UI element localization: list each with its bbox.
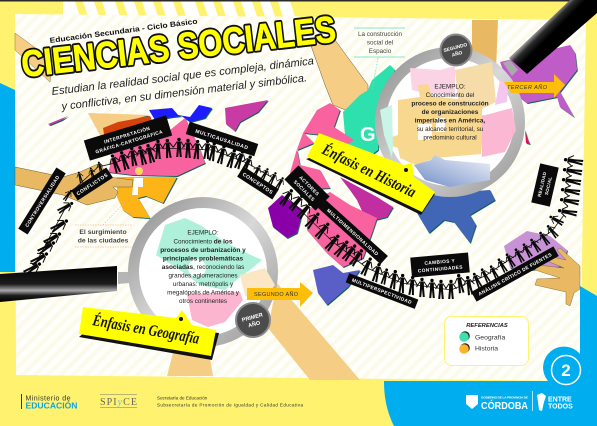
lens example text: urbanas: metrópolis y: [173, 281, 234, 288]
lens example text: de organizaciones: [422, 109, 479, 116]
continent: purple: [268, 195, 303, 238]
footer logo: ministerio de educación: Ministerio de: [26, 396, 71, 402]
footer logo: gobierno de córdoba: GOBIERNO DE LA PROVINCIA DE: [481, 396, 528, 400]
label: multicausalidad: MULTICAUSALIDAD: [194, 129, 249, 151]
lens example text: imperiales en América,: [415, 118, 485, 124]
lens example text: predominio cultural: [423, 134, 477, 142]
lens example text: procesos de urbanización y: [160, 247, 246, 254]
map beige: [240, 268, 275, 300]
label: interpretación gráfica-cartográfica: INTERPRETACIÓN: [103, 124, 151, 145]
map pink: [187, 292, 243, 327]
footer logo: spiyce: SPIyCE: [100, 397, 137, 408]
chain of people: [17, 138, 584, 299]
footer text: secretaría: [157, 396, 303, 408]
label: cambios y continuidades: CAMBIOS Y: [424, 258, 456, 267]
page number badge: [552, 356, 580, 384]
intro text: y conflictiva, en su dimensión material y simbólica.: [60, 72, 308, 113]
label: controversialidad: [18, 168, 66, 234]
puzzle pieces white and yellow: [132, 167, 143, 195]
banner: énfasis en geografía: Énfasis en Geografía: [91, 310, 201, 348]
continent: dark blue: [415, 190, 495, 243]
lens example text: asociadas, reconociendo las: [162, 264, 244, 271]
banner: énfasis en historia: Énfasis en Historia: [319, 139, 419, 201]
title: CIENCIAS SOCIALES: [19, 8, 338, 85]
label: realidad social: SOCIAL: [544, 176, 553, 196]
hand: left with chain: [15, 163, 133, 205]
caption: el surgimiento de las ciudades: El surgimiento: [79, 229, 127, 236]
continent: blue violet: [313, 265, 360, 305]
handle: [509, 0, 597, 74]
footer text: secretaría: Secretaría de Educación: [157, 396, 208, 400]
legend: referencias: Historia: [475, 346, 498, 352]
label: cambios y continuidades: [410, 253, 470, 277]
puzzle pieces: [410, 66, 455, 95]
label: cambios y continuidades: CONTINUIDADES: [418, 264, 464, 274]
intro text: Estudian la realidad social que es compleja, dinámica: [51, 55, 315, 98]
label: multiperspectividad: [346, 273, 418, 309]
footer logo: entre todos: [537, 393, 573, 411]
lens example text: megalópolis de América y: [167, 290, 240, 296]
label: conceptos: [237, 167, 279, 199]
title: CIENCIAS SOCIALES: [19, 8, 338, 85]
page number badge: 2: [561, 361, 571, 380]
lens example text: otros continentes: [179, 298, 227, 305]
banner: énfasis en geografía: [79, 307, 219, 360]
footer logo: ministerio de educación: EDUCACIÓN: [26, 400, 78, 410]
label: interpretación gráfica-cartográfica: GRÁFICA-CARTOGRÁFICA: [95, 128, 164, 155]
legend: referencias: REFERENCIAS: [466, 323, 508, 329]
badge: segundo año: SEGUNDO: [443, 42, 468, 54]
caption: el surgimiento de las ciudades: de las ciudades: [78, 238, 129, 244]
lens example text: grandes aglomeraciones: [169, 272, 237, 280]
arm: under geography banner: [167, 353, 213, 376]
badge: segundo año: [440, 34, 472, 66]
continent: alaska beige: [88, 113, 150, 140]
badge: primer año: PRIMER: [241, 312, 264, 324]
hand: right bottom: [535, 248, 580, 306]
label: interpretación gráfica-cartográfica: [84, 115, 172, 161]
label: análisis crítico de fuentes: ANÁLISIS CRÍTICO DE FUENTES: [477, 250, 554, 298]
label: actores sociales: ACTORES: [297, 175, 320, 198]
continent: canada orange: [103, 116, 152, 140]
ring: [380, 52, 520, 192]
footer logo: entre todos: TODOS: [548, 404, 573, 410]
arrow: segundo año: [247, 282, 313, 307]
lens example text: principales problemáticas: [163, 256, 243, 262]
mark: small red island: [525, 130, 530, 144]
caption: el surgimiento de las ciudades: [75, 202, 132, 247]
caption: la construcción social del espacio: Espacio: [369, 48, 392, 55]
lens example text: su alcance territorial, su: [417, 126, 484, 133]
caption: la construcción social del espacio: social del: [367, 40, 393, 46]
continent: canada blue: [149, 105, 212, 122]
blue corner region: [384, 286, 597, 426]
caption: la construcción social del espacio: [354, 28, 405, 90]
label: multiperspectividad: MULTIPERSPECTIVIDAD: [351, 277, 413, 306]
badge: primer año: [236, 303, 270, 337]
continent: asia magenta: [340, 177, 393, 222]
label: conflictos: CONFLICTOS: [76, 172, 110, 197]
label: conflictos: [71, 168, 113, 200]
label: multidimensionalidad: MULTIDIMENSIONALIDAD: [325, 208, 380, 258]
hand: behind title left: [15, 33, 52, 82]
lens example text: [160, 230, 246, 305]
footer logo: ministerio de educación: [21, 394, 78, 410]
badge: primer año: AÑO: [247, 319, 262, 329]
continent: greenland magenta: [225, 100, 268, 131]
legend: referencias: Geografía: [475, 334, 505, 342]
arrow: tercer año: TERCER AÑO: [507, 84, 548, 91]
footer logo: gobierno de córdoba: CÓRDOBA: [481, 399, 528, 412]
label: realidad social: [531, 163, 559, 207]
letter G white on mint: G: [360, 124, 376, 146]
ring: [134, 202, 272, 342]
lens example text: EJEMPLO:: [434, 84, 466, 90]
arrow: tercer año: [504, 74, 565, 98]
label: actores sociales: [284, 165, 330, 211]
continent: africa pink: [307, 192, 377, 267]
footer text: secretaría: Subsecretaría de Promoción de Igualdad y Calidad Educativa: [157, 402, 303, 408]
label: realidad social: REALIDAD: [537, 171, 547, 197]
subtitle: education level: Educación Secundaria - Ciclo Básico: [49, 17, 198, 45]
continent: top right purple: [500, 45, 577, 117]
arm: bottom center: [268, 283, 360, 380]
lens example text: Conocimiento del: [426, 92, 474, 99]
hand: top centre: [310, 40, 368, 117]
continent: europe pink: [290, 103, 354, 190]
label: conceptos: CONCEPTOS: [241, 172, 274, 196]
lens example text: Conocimiento de los: [173, 238, 233, 246]
world map continents: [48, 45, 577, 305]
badge: segundo año: AÑO: [451, 49, 463, 59]
map mint: [156, 218, 262, 290]
label: multidimensionalidad: [318, 200, 388, 264]
legend: referencias: [444, 316, 528, 366]
lens example text: EJEMPLO:: [187, 230, 219, 236]
arrow: segundo año: SEGUNDO AÑO: [254, 291, 299, 298]
magnifier: left lens (geografía): [0, 202, 275, 342]
continent: greenland mint: [343, 65, 395, 156]
footer logo: gobierno de córdoba: [466, 391, 533, 412]
handle: [0, 266, 117, 302]
caption: la construcción social del espacio: La construcción: [358, 31, 403, 38]
hand: arm from top into right lens: [458, 20, 498, 110]
continent: lower right lilac: [504, 231, 567, 270]
label: controversialidad: CONTROVERSIALIDAD: [24, 174, 61, 229]
magnifier: right lens (historia): [380, 0, 597, 192]
label: actores sociales: SOCIALES: [292, 179, 316, 203]
lens example text: proceso de construcción: [411, 100, 489, 108]
continent: sliver: [48, 116, 68, 125]
footer logo: entre todos: ENTRE: [548, 396, 572, 404]
label: multicausalidad: [186, 122, 258, 156]
label: análisis crítico de fuentes: [471, 246, 559, 302]
continent: north america pink: [108, 118, 205, 176]
lens example text: [411, 84, 489, 142]
continent: mexico orange: [117, 177, 177, 218]
